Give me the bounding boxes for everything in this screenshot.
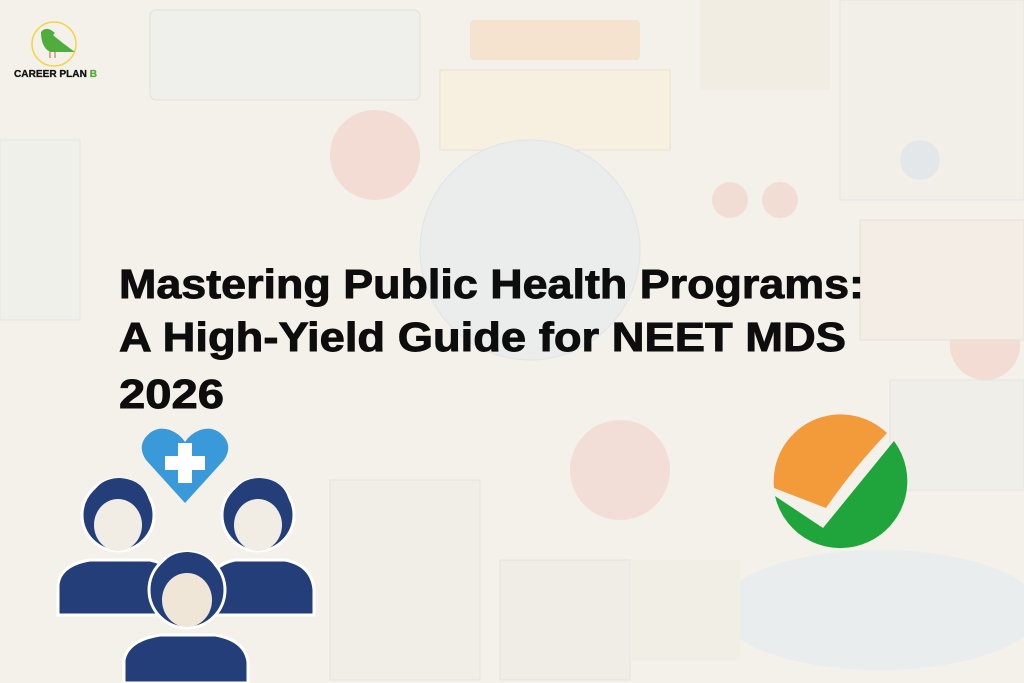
- person right: [205, 478, 314, 615]
- icon: bird in circle: [32, 22, 76, 66]
- person front: [124, 552, 248, 683]
- logo text: CAREER PLAN B: [14, 68, 97, 80]
- icon: NTA check mark: [774, 414, 907, 548]
- logo: [14, 22, 97, 80]
- icon: group of people: [58, 478, 314, 683]
- title: A High-Yield Guide for NEET MDS: [119, 314, 846, 360]
- person left: [58, 478, 178, 615]
- title: Mastering Public Health Programs:: [119, 261, 864, 307]
- icon: heart with cross: [142, 429, 228, 503]
- title: [119, 261, 864, 417]
- title: 2026: [119, 371, 224, 417]
